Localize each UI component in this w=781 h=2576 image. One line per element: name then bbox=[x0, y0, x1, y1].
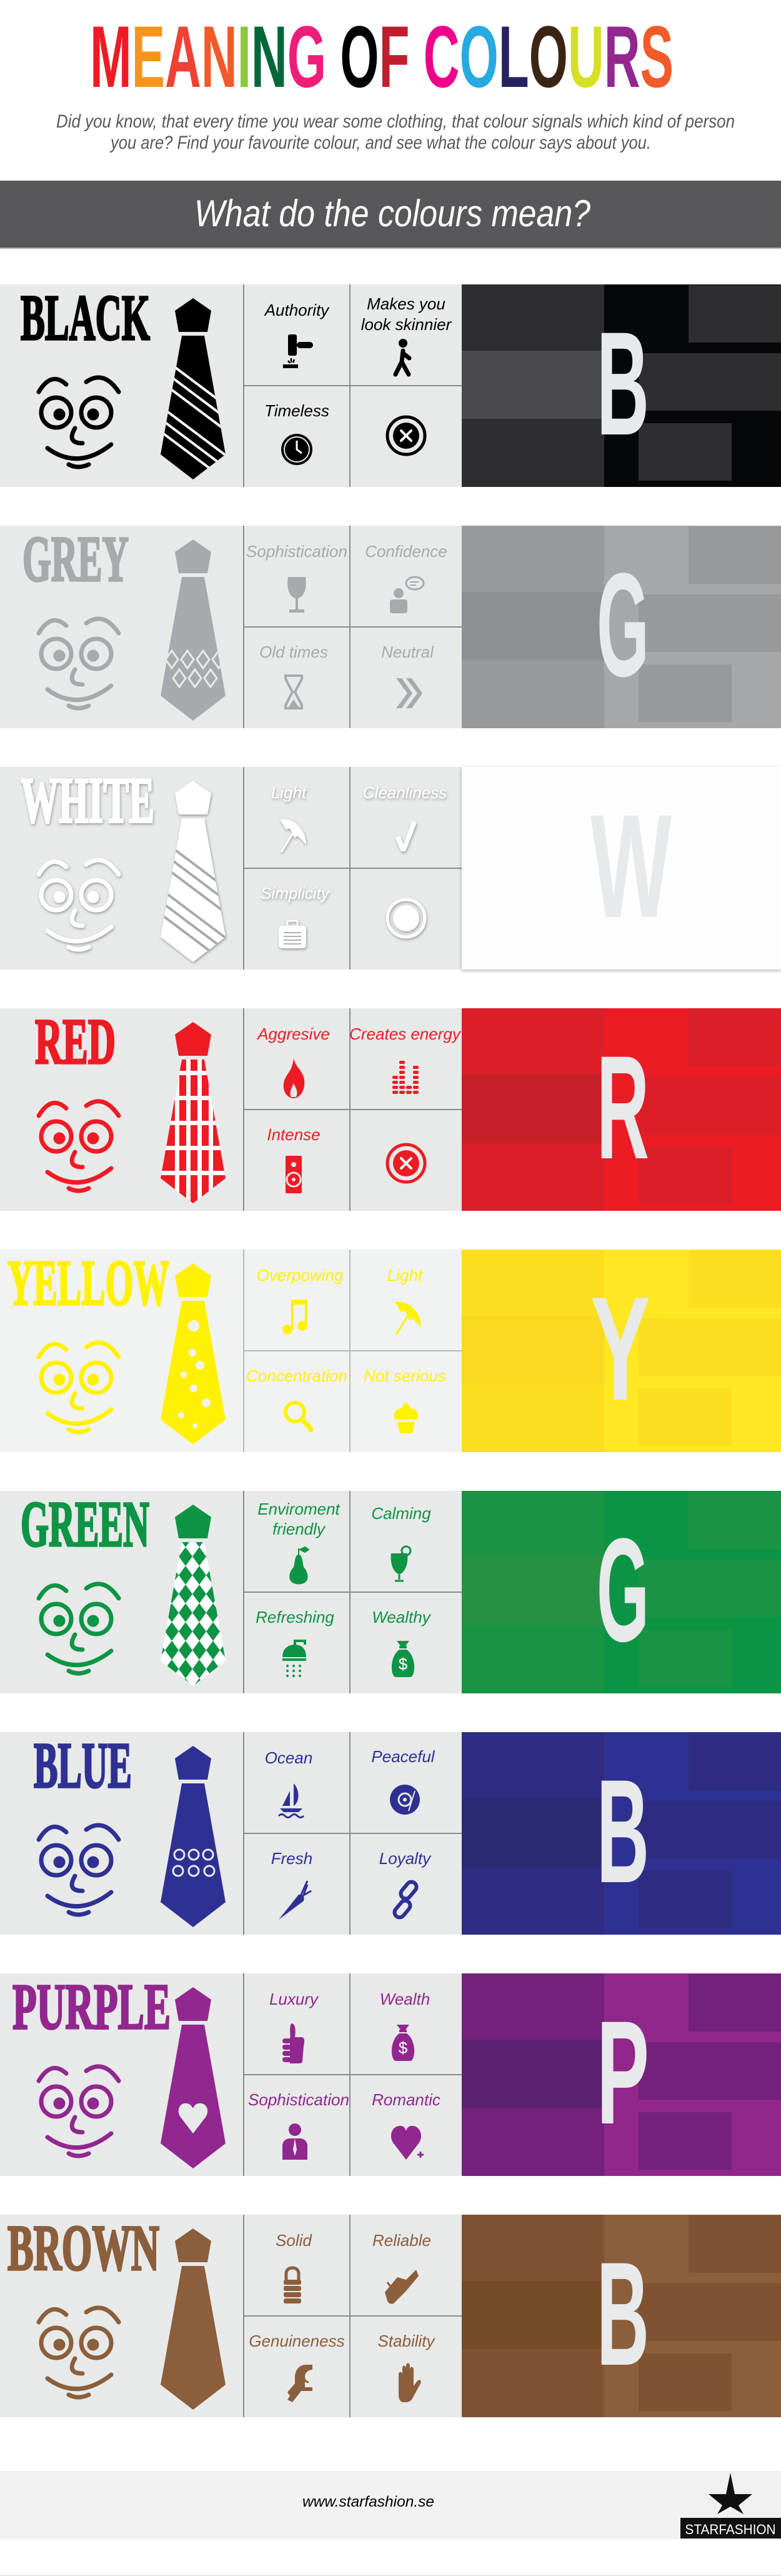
cell: Solid bbox=[276, 2231, 312, 2303]
cell: Authority: Authority bbox=[264, 301, 330, 319]
heading: BROWN: BROWN bbox=[7, 2212, 159, 2284]
panel: YELLOW bbox=[0, 1247, 781, 1452]
colour block: P bbox=[462, 1973, 781, 2176]
heading: YELLOW: YELLOW bbox=[7, 1247, 169, 1319]
cell: Aggresive: Aggresive bbox=[256, 1025, 330, 1043]
cell: Loyalty bbox=[379, 1849, 432, 1920]
face illustration bbox=[39, 2308, 119, 2397]
cell: Peaceful: Peaceful bbox=[371, 1747, 435, 1766]
cell: Overpowing: Overpowing bbox=[257, 1266, 344, 1285]
cell: Refreshing bbox=[256, 1608, 334, 1677]
cell: Not serious bbox=[364, 1366, 446, 1433]
colour block: R: R bbox=[597, 1025, 649, 1190]
cell: Wealthy bbox=[372, 1608, 432, 1677]
cell: Reliable bbox=[372, 2231, 431, 2304]
logo: starfashion: STARFASHION bbox=[685, 2522, 776, 2537]
face illustration bbox=[39, 1584, 119, 1673]
cell: Makes you look skinnier: look skinnier bbox=[361, 315, 452, 334]
colour block: B: B bbox=[597, 301, 649, 466]
cell: Light: Light bbox=[271, 783, 307, 802]
cell: Enviroment friendly bbox=[257, 1500, 341, 1584]
subheading band bbox=[0, 181, 781, 249]
cell: Solid: Solid bbox=[276, 2231, 312, 2250]
intro text: you are? Find your favourite colour, and see what the colour says about you. bbox=[109, 133, 651, 153]
cell: Makes you look skinnier bbox=[361, 294, 452, 374]
cell: Wealth bbox=[380, 1990, 430, 2061]
tie illustration bbox=[161, 539, 226, 721]
cell: Timeless: Timeless bbox=[264, 401, 329, 420]
colour block: W: W bbox=[590, 784, 672, 949]
panel: GREEN bbox=[0, 1488, 781, 1693]
tie illustration bbox=[161, 1505, 226, 1686]
tie illustration bbox=[161, 1746, 226, 1927]
cell: Intense bbox=[267, 1125, 321, 1193]
cell: Fresh: Fresh bbox=[271, 1849, 312, 1868]
panel: BROWN bbox=[0, 2212, 781, 2417]
tie illustration bbox=[160, 781, 227, 964]
tie illustration bbox=[161, 1987, 226, 2168]
face illustration bbox=[39, 2067, 119, 2156]
face illustration bbox=[39, 378, 119, 467]
heading: WHITE: WHITE bbox=[21, 764, 154, 836]
colour block: Y: Y bbox=[590, 1266, 650, 1431]
heading: BLACK: BLACK bbox=[21, 282, 150, 354]
cell: Enviroment friendly: Enviroment bbox=[257, 1500, 341, 1518]
cell: Ocean: Ocean bbox=[265, 1748, 312, 1767]
cell: Refreshing: Refreshing bbox=[256, 1608, 334, 1626]
panel: GREY bbox=[0, 523, 781, 728]
face illustration bbox=[39, 860, 119, 950]
cell: Old times bbox=[259, 643, 328, 708]
face illustration bbox=[39, 1343, 119, 1432]
footer url: www.starfashion.se bbox=[302, 2493, 434, 2510]
cell: Timeless bbox=[264, 401, 329, 465]
colour block: B bbox=[462, 1732, 781, 1935]
cell: Makes you look skinnier: Makes you bbox=[367, 294, 445, 313]
heading: BLUE: BLUE bbox=[34, 1730, 132, 1802]
cell: no icon bbox=[387, 1145, 425, 1182]
cell: Authority bbox=[264, 301, 330, 368]
cell: Old times: Old times bbox=[259, 643, 328, 661]
colour block: G: G bbox=[597, 1508, 649, 1673]
cell: Overpowing bbox=[257, 1266, 344, 1335]
cell: Reliable: Reliable bbox=[372, 2231, 431, 2250]
panel: WHITE bbox=[0, 764, 781, 970]
colour block: G bbox=[462, 526, 781, 728]
panel: BLUE bbox=[0, 1730, 781, 1935]
colour block: W bbox=[462, 767, 781, 970]
cell: Simplicity bbox=[261, 884, 331, 948]
cell: Light: Light bbox=[387, 1266, 424, 1285]
colour block: B: B bbox=[597, 2232, 649, 2397]
face illustration bbox=[39, 619, 119, 708]
tie illustration bbox=[161, 2228, 226, 2410]
cell: Enviroment friendly: friendly bbox=[272, 1520, 326, 1538]
panel: PURPLE bbox=[0, 1971, 781, 2176]
cell: Intense: Intense bbox=[267, 1125, 321, 1144]
panel: BLACK bbox=[0, 282, 781, 487]
header title: MEANING OF COLOURS bbox=[90, 8, 674, 106]
cell: Not serious: Not serious bbox=[364, 1366, 446, 1385]
panel: RED bbox=[0, 1006, 781, 1211]
cell: Wealth: Wealth bbox=[380, 1990, 430, 2008]
colour block: B: B bbox=[597, 1749, 649, 1914]
footer band bbox=[0, 2471, 781, 2539]
heading: GREY: GREY bbox=[22, 523, 129, 595]
cell: Fresh bbox=[271, 1849, 312, 1920]
cell: Light bbox=[387, 1266, 424, 1335]
subheading band: What do the colours mean? bbox=[194, 193, 591, 234]
colour block: B bbox=[462, 284, 781, 487]
heading: RED: RED bbox=[35, 1006, 116, 1078]
tie illustration bbox=[161, 1263, 226, 1445]
cell: Genuineness bbox=[249, 2332, 345, 2402]
cell: Ocean bbox=[265, 1748, 312, 1818]
cell: Calming bbox=[371, 1504, 431, 1581]
cell: Stability: Stability bbox=[377, 2332, 436, 2350]
cell: Confidence: Confidence bbox=[365, 542, 447, 561]
heading: PURPLE: PURPLE bbox=[12, 1971, 171, 2043]
cell: no icon bbox=[387, 900, 425, 937]
colour block: G: G bbox=[597, 543, 649, 708]
cell: Neutral bbox=[381, 643, 434, 708]
intro text bbox=[56, 111, 735, 153]
cell: Calming: Calming bbox=[371, 1504, 431, 1523]
cell: Sophistication: Sophistication bbox=[246, 542, 347, 561]
cell: Genuineness: Genuineness bbox=[249, 2332, 345, 2350]
logo: starfashion bbox=[680, 2471, 781, 2538]
cell: Simplicity: Simplicity bbox=[261, 884, 331, 903]
face illustration bbox=[39, 1825, 119, 1915]
cell: Stability bbox=[377, 2332, 436, 2402]
cell: Sophistication bbox=[246, 542, 347, 613]
cell: Sophistication: Sophistication bbox=[248, 2090, 349, 2109]
cell: Sophistication bbox=[248, 2090, 349, 2160]
cell: Cleanliness bbox=[363, 783, 447, 851]
heading: GREEN: GREEN bbox=[21, 1488, 149, 1560]
cell: Romantic bbox=[372, 2090, 440, 2160]
cell: no icon bbox=[387, 417, 425, 454]
cell: Light bbox=[271, 783, 307, 852]
colour block: Y bbox=[462, 1250, 781, 1452]
tie illustration bbox=[161, 1022, 226, 1203]
cell: Cleanliness: Cleanliness bbox=[363, 783, 447, 802]
cell: Neutral: Neutral bbox=[381, 643, 434, 661]
cell: Creates energy bbox=[349, 1025, 462, 1094]
cell: Romantic: Romantic bbox=[372, 2090, 440, 2109]
cell: Luxury: Luxury bbox=[269, 1990, 319, 2008]
colour block: B bbox=[462, 2215, 781, 2417]
tie illustration bbox=[161, 298, 226, 479]
cell: Concentration: Concentration bbox=[246, 1366, 347, 1385]
cell: Confidence bbox=[365, 542, 447, 613]
cell: Aggresive bbox=[256, 1025, 330, 1098]
face illustration bbox=[39, 1101, 119, 1191]
colour block: G bbox=[462, 1491, 781, 1693]
colour block: R bbox=[462, 1008, 781, 1211]
cell: Luxury bbox=[269, 1990, 319, 2063]
colour block: P: P bbox=[597, 1990, 649, 2155]
cell: Peaceful bbox=[371, 1747, 435, 1815]
cell: Concentration bbox=[246, 1366, 347, 1430]
cell: Loyalty: Loyalty bbox=[379, 1849, 432, 1868]
cell: Wealthy: Wealthy bbox=[372, 1608, 432, 1626]
cell: Creates energy: Creates energy bbox=[349, 1025, 462, 1043]
